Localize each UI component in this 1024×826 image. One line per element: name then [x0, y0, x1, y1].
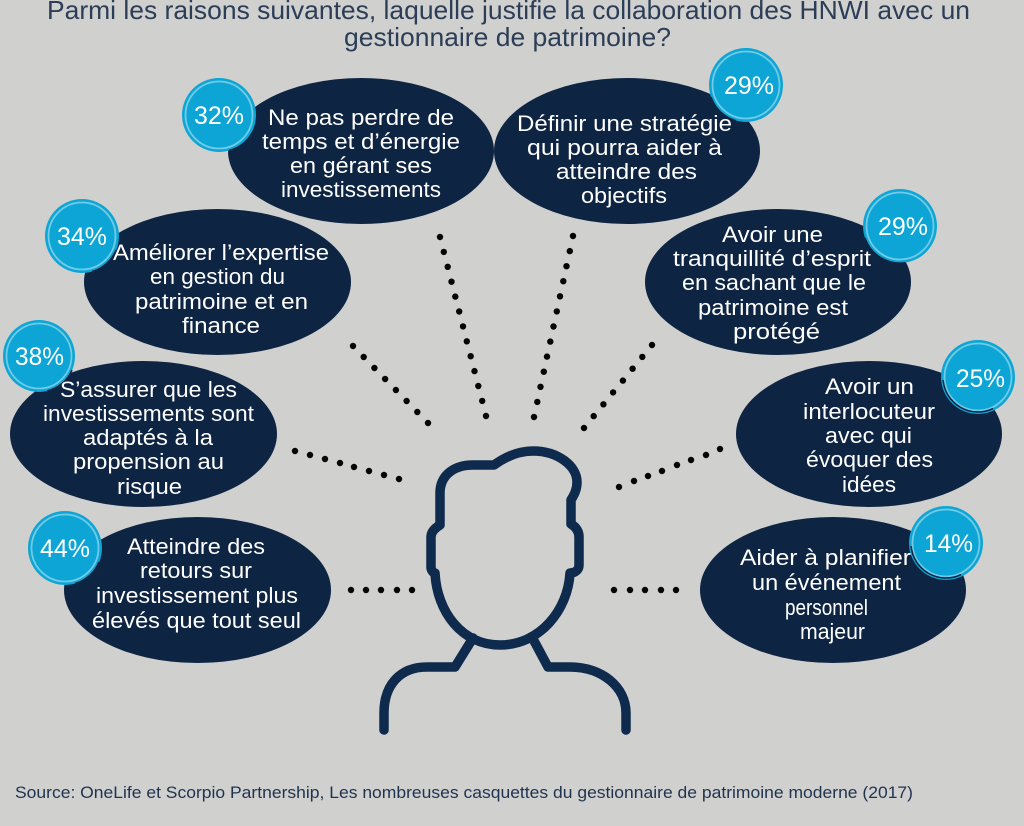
badge 38%: 38% [15, 343, 64, 371]
badge 44%: 44% [40, 535, 90, 563]
dotted connector: top left [437, 234, 489, 419]
bubble [736, 361, 1002, 507]
panel: 29% tranquillité d'esprit [645, 189, 937, 355]
text: patrimoine est [698, 295, 848, 320]
text: Aider à planifier [740, 545, 911, 570]
text: protégé [733, 319, 820, 344]
dotted connector: upper right diagonal [581, 342, 655, 431]
text: évoquer des [806, 447, 933, 472]
text: adaptés à la [83, 425, 214, 450]
text: investissement plus [96, 583, 298, 608]
panel: 29% définir une stratégie [494, 48, 783, 224]
text [673, 222, 871, 344]
dotted connector: bottom right [611, 587, 679, 593]
badge 29% [863, 189, 937, 263]
badge 44% [28, 511, 102, 585]
text: finance [182, 313, 260, 338]
source note: Source: OneLife et Scorpio Partnership, Les nombreuses casquettes du gestionnaire de patrimoine moderne (2017) [15, 784, 913, 802]
bubble [645, 209, 911, 355]
text [43, 377, 254, 499]
text: un événement [752, 570, 901, 595]
bubble [700, 517, 966, 663]
text: investissements sont [43, 401, 254, 426]
text: en gérant ses [290, 153, 432, 178]
icon: person outline [384, 451, 626, 730]
text: tranquillité d’esprit [673, 246, 871, 271]
badge 14%: 14% [924, 530, 973, 558]
panel: 44% retours sur investissement [28, 511, 331, 663]
badge 32%: 32% [194, 102, 244, 130]
text [517, 111, 732, 208]
text [803, 374, 935, 497]
text: élevés que tout seul [92, 608, 301, 633]
text: retours sur [140, 558, 252, 583]
panel: 32% ne pas perdre de temps [182, 78, 494, 224]
badge 14% [909, 506, 983, 580]
badge 25%: 25% [956, 365, 1005, 393]
dotted connector: top right [531, 233, 576, 420]
panel: 25% interlocuteur [736, 340, 1015, 507]
badge 32% [182, 78, 256, 152]
panel: 14% événement personnel [700, 506, 983, 663]
text: Améliorer l’expertise [113, 240, 329, 265]
text: interlocuteur [803, 399, 935, 424]
dotted connector: upper left diagonal [350, 343, 431, 426]
text: avec qui [825, 423, 912, 448]
panel: 34% améliorer l'expertise [45, 199, 351, 355]
badge 29%: 29% [724, 72, 774, 100]
text: Définir une stratégie [517, 111, 732, 136]
text: investissements [281, 177, 441, 202]
text: qui pourra aider à [527, 135, 723, 160]
dotted connector: lower right [616, 446, 723, 490]
text: majeur [800, 619, 865, 644]
text: atteindre des [556, 159, 697, 184]
dotted connector: lower left [292, 448, 402, 482]
bubble [494, 78, 760, 224]
text: Avoir une [722, 222, 823, 247]
badge 34% [45, 199, 119, 273]
text [113, 240, 329, 338]
text: idées [842, 472, 896, 497]
text: personnel [785, 595, 868, 620]
title [47, 0, 970, 52]
panel: 38% propension au risque [3, 320, 277, 507]
text [740, 545, 911, 644]
text: Avoir un [825, 374, 914, 399]
text [92, 534, 301, 633]
text: en sachant que le [682, 270, 866, 295]
text: Atteindre des [127, 534, 265, 559]
bubble [10, 361, 277, 507]
title: gestionnaire de patrimoine? [344, 22, 671, 52]
bubble [84, 209, 351, 355]
badge 29% [709, 48, 783, 122]
badge 38% [3, 320, 75, 392]
dotted connector: bottom left [348, 587, 415, 593]
text: Ne pas perdre de [268, 105, 454, 130]
text: temps et d’énergie [262, 129, 460, 154]
text: S’assurer que les [60, 377, 237, 402]
badge 34%: 34% [57, 223, 107, 251]
text: en gestion du [150, 264, 285, 289]
bubble [228, 78, 494, 224]
badge 25% [941, 340, 1015, 414]
text: propension au [73, 449, 224, 474]
badge 29%: 29% [878, 213, 928, 241]
text: risque [117, 474, 182, 499]
text: patrimoine et en [135, 289, 308, 314]
text [262, 105, 460, 202]
bubble [64, 517, 331, 663]
text: objectifs [581, 183, 667, 208]
